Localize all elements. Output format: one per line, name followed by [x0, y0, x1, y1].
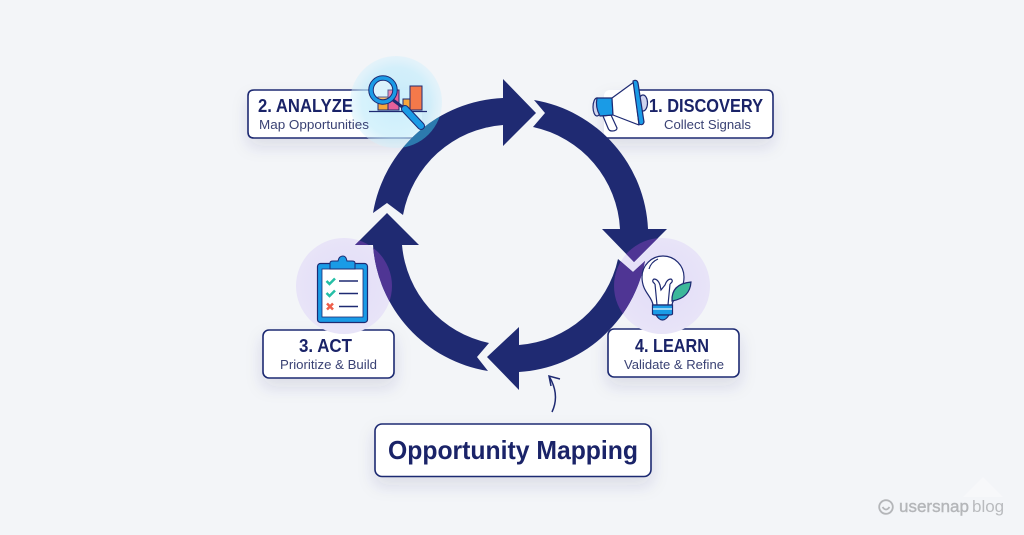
halo: analyze: [350, 56, 442, 148]
halo overlap on arrows: [296, 56, 710, 334]
label text: 4. Learn: 4. LEARN: [635, 336, 709, 356]
label text: 4. Learn: Validate & Refine: [624, 357, 724, 372]
label text: 2. Analyze: [258, 96, 370, 132]
icon: megaphone: [593, 80, 648, 131]
label box: 4. Learn: [608, 329, 739, 377]
label text: 2. Analyze: 2. ANALYZE: [258, 96, 353, 116]
small curved arrow: [549, 376, 560, 412]
title box: Opportunity Mapping: Opportunity Mapping: [388, 435, 638, 465]
label text: 3. Act: Prioritize & Build: [280, 357, 377, 372]
label text: 1. Discovery: 1. DISCOVERY: [649, 96, 763, 116]
arrow: learn to act: [487, 259, 645, 390]
label box: 1. Discovery: [604, 90, 773, 138]
watermark: usersnap blog: [879, 477, 1004, 516]
label text: 3. Act: 3. ACT: [299, 336, 352, 356]
label box: 3. Act: [263, 330, 394, 378]
arrow: analyze to discovery: [373, 79, 536, 215]
icon: light bulb with leaf: [642, 256, 691, 320]
label text: 1. Discovery: Collect Signals: [664, 117, 751, 132]
watermark: usersnap blog: usersnap: [899, 497, 969, 516]
arrow: act to analyze: [355, 213, 489, 371]
icon: clipboard checklist: [318, 256, 368, 322]
label text: 3. Act: [280, 336, 377, 372]
halo: learn: [614, 238, 710, 334]
label text: 4. Learn: [624, 336, 724, 372]
label text: 2. Analyze: Map Opportunities: [259, 117, 370, 132]
cycle arrows: [355, 79, 667, 390]
icon: magnifier over bar chart: [369, 78, 427, 126]
halo: act: [296, 238, 392, 334]
label text: 1. Discovery: [649, 96, 763, 132]
title box: Opportunity Mapping: [375, 424, 651, 476]
watermark: usersnap blog: blog: [972, 497, 1004, 516]
arrow: discovery to learn: [533, 100, 667, 262]
label box: 2. Analyze: [248, 90, 422, 138]
